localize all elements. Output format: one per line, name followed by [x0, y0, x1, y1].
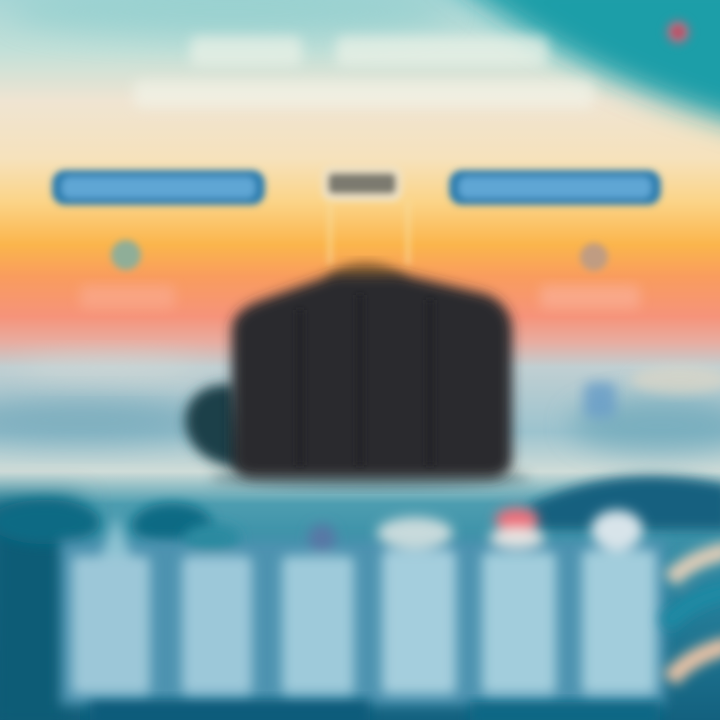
icon: top right badge [663, 17, 693, 47]
left heading pill [52, 170, 265, 205]
icon: small blue marker [584, 382, 616, 418]
card row [72, 508, 656, 694]
icon: right circle [580, 243, 608, 271]
card 6 [582, 510, 656, 694]
left caption [80, 285, 175, 309]
travel bag [185, 262, 530, 488]
card 1 [72, 515, 150, 694]
center heading pill [322, 166, 402, 201]
card 4 [377, 517, 456, 694]
card 3 [282, 524, 354, 694]
right heading pill [449, 170, 661, 205]
decorative swirl at lower right [665, 550, 720, 680]
title [134, 36, 594, 108]
connector lines to bag [330, 200, 408, 265]
right caption [540, 285, 640, 309]
card 2 [182, 524, 252, 694]
icon: left circle [111, 240, 141, 270]
card 5 [482, 508, 556, 694]
